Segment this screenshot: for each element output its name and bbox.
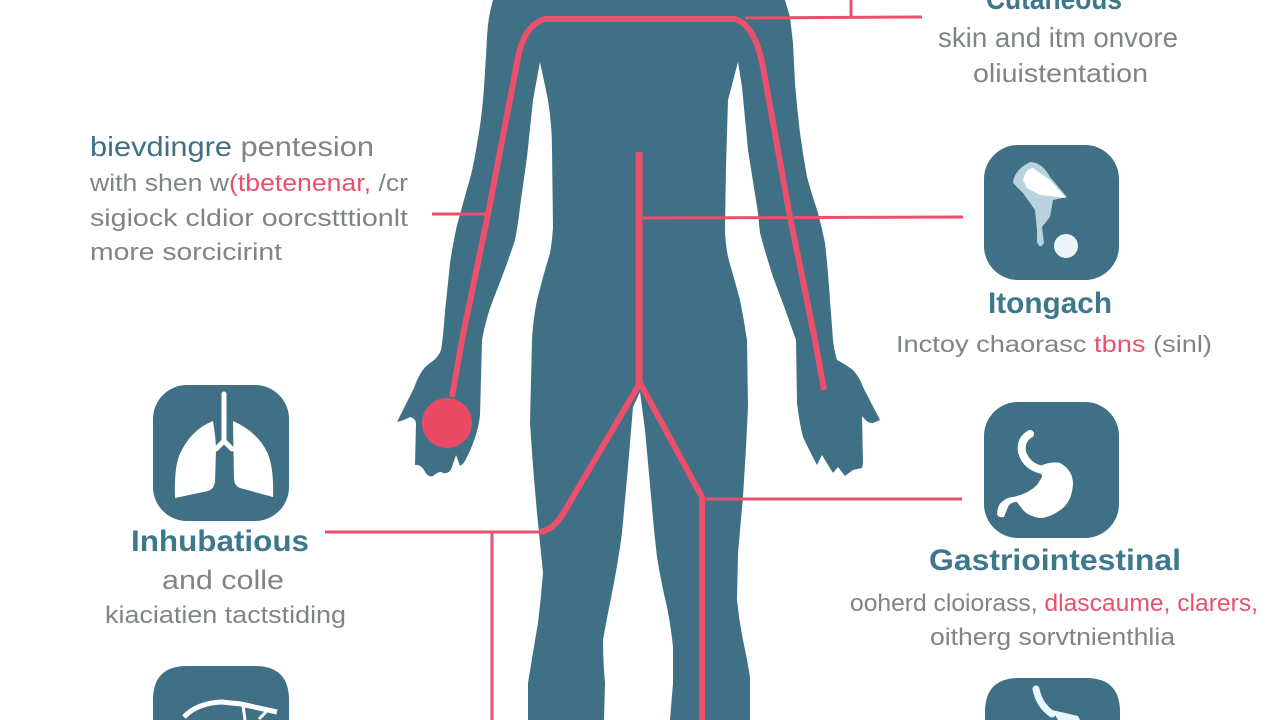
text: gastrointestinal block bbox=[850, 544, 1258, 651]
text: cutaneous block: oliuistentation bbox=[973, 58, 1148, 88]
text: cutaneous block bbox=[938, 0, 1178, 88]
text: cutaneous block: skin and itm onvore bbox=[938, 22, 1178, 53]
text: left description block: sigiock cldior oorcstttionlt bbox=[90, 205, 408, 232]
text: gastrointestinal block: Gastriointestinal bbox=[929, 544, 1181, 577]
text: inhalation block: kiaciatien tactstiding bbox=[105, 602, 346, 629]
icon: smoke / lung spot bbox=[984, 145, 1119, 280]
red circle on hand bbox=[422, 398, 472, 448]
icon: intestine (cropped) bbox=[985, 678, 1120, 720]
text: left description block: more sorcicirint bbox=[90, 239, 282, 266]
text: inhalation block bbox=[105, 525, 346, 629]
text: inhalation block: and colle bbox=[162, 565, 284, 595]
text: gastrointestinal block: ooherd cloiorass, dlascaume, clarers, bbox=[850, 590, 1258, 617]
text: gastrointestinal block: oitherg sorvtnienthlia bbox=[930, 624, 1176, 651]
icon: stomach bbox=[984, 402, 1119, 538]
human body silhouette bbox=[397, 0, 880, 720]
heading: stomach group: Itongach bbox=[988, 287, 1112, 320]
text: left description block bbox=[89, 131, 408, 266]
text: left description block: with shen w (tbetenenar, /cr bbox=[89, 170, 408, 197]
icon: lungs bbox=[153, 385, 289, 521]
icon: liver (cropped) bbox=[153, 666, 289, 720]
text: inhalation block: Inhubatious bbox=[131, 525, 309, 558]
heading: stomach group: Inctoy chaorasc tbns (sinl) bbox=[896, 331, 1212, 357]
text: left description block: bievdingre pentesion bbox=[90, 131, 374, 162]
red vessel lines bbox=[325, 0, 963, 720]
heading: stomach group bbox=[896, 287, 1212, 357]
